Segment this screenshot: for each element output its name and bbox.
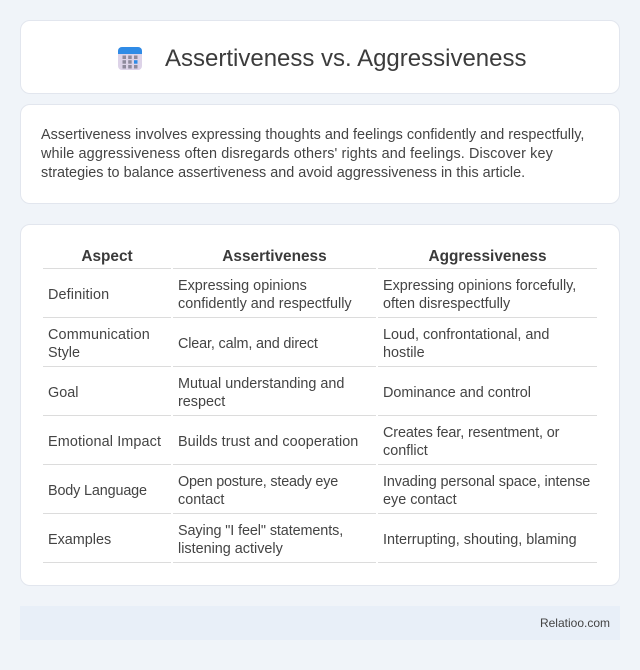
panel: comparison table card <box>20 224 620 586</box>
panel: intro card <box>20 104 620 204</box>
comparison table: Open posture, steady eye <box>178 474 338 490</box>
comparison table: Emotional Impact <box>48 434 161 450</box>
row: body language <box>43 474 597 514</box>
intro text <box>41 127 584 181</box>
intro text: Assertiveness involves expressing thoughts and feelings confidently and respectfully, <box>41 127 584 143</box>
comparison table: respect <box>178 394 225 410</box>
comparison table: Invading personal space, intense <box>383 474 590 490</box>
footer text: Relatioo.com <box>540 616 610 630</box>
comparison table: often disrespectfully <box>383 296 510 312</box>
intro text: while aggressiveness often disregards others' rights and feelings. Discover key <box>41 146 553 162</box>
intro text: strategies to balance assertiveness and avoid aggressiveness in this article. <box>41 165 525 181</box>
comparison table: Saying "I feel" statements, <box>178 523 343 539</box>
comparison table: confidently and respectfully <box>178 296 352 312</box>
row: examples <box>43 523 597 563</box>
row: emotional impact <box>43 425 597 465</box>
comparison table: contact <box>178 492 224 508</box>
row: communication style <box>43 327 597 367</box>
comparison table <box>43 248 597 563</box>
row: definition <box>43 278 597 318</box>
comparison table: Expressing opinions forcefully, <box>383 278 576 294</box>
panel: title card <box>20 20 620 94</box>
comparison table: Examples <box>48 532 111 548</box>
comparison table: conflict <box>383 443 428 459</box>
comparison table: Interrupting, shouting, blaming <box>383 532 577 548</box>
comparison table: Body Language <box>48 483 147 499</box>
comparison table: Loud, confrontational, and <box>383 327 549 343</box>
icon: calendar <box>118 47 142 70</box>
comparison table: Communication <box>48 327 150 343</box>
comparison table: Creates fear, resentment, or <box>383 425 559 441</box>
comparison table: hostile <box>383 345 425 361</box>
comparison table: Goal <box>48 385 78 401</box>
row: goal <box>43 376 597 416</box>
comparison table: Builds trust and cooperation <box>178 434 358 450</box>
footer bar <box>20 606 620 640</box>
title: Assertiveness vs. Aggressiveness <box>165 45 526 72</box>
comparison table: Expressing opinions <box>178 278 307 294</box>
comparison table: Clear, calm, and direct <box>178 336 318 352</box>
comparison table: Mutual understanding and <box>178 376 344 392</box>
comparison table: Dominance and control <box>383 385 531 401</box>
table header <box>43 248 597 269</box>
comparison table: Aggressiveness <box>428 248 547 265</box>
comparison table: Assertiveness <box>222 248 327 265</box>
comparison table: listening actively <box>178 541 283 557</box>
comparison table: eye contact <box>383 492 457 508</box>
comparison table: Definition <box>48 287 109 303</box>
comparison table: Style <box>48 345 80 361</box>
comparison table: Aspect <box>81 248 133 265</box>
